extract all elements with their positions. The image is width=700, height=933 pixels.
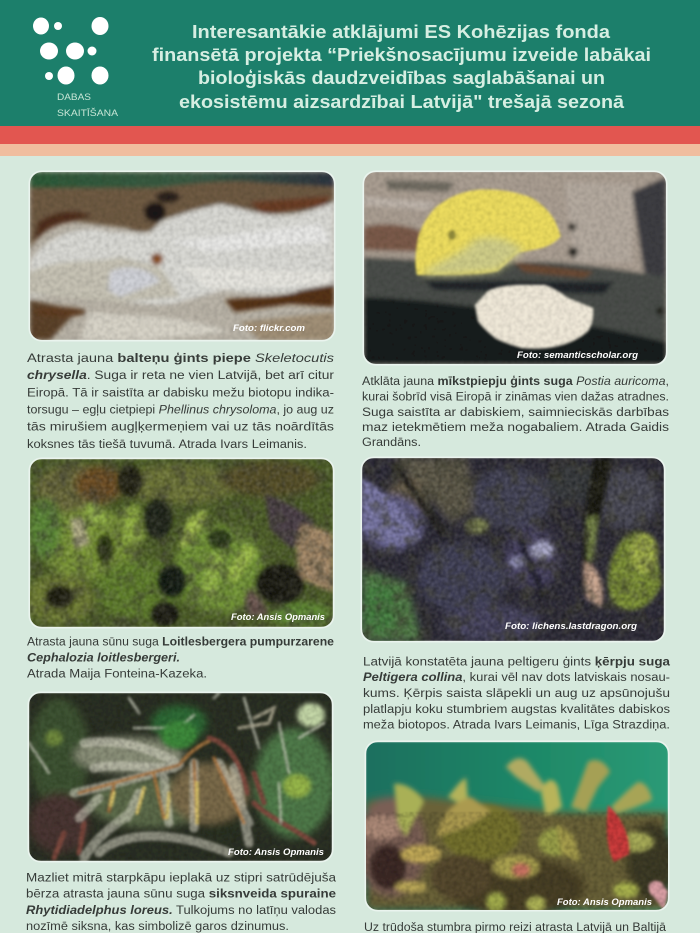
title: ekosistēmu aizsardzībai Latvijā" trešajā sezonā (179, 92, 625, 112)
text block: Cephalozia loitlesbergeri: Atrada Maija Fonteina-Kazeka. (27, 668, 207, 680)
photo: Rhytidiadelphus loreus moss (28, 692, 334, 862)
title (152, 22, 651, 112)
photo: yellow and white polypore on wood (362, 170, 668, 366)
text block: Rhytidiadelphus loreus: bērza atrasta jauna sūnu suga siksnveida spuraine (26, 888, 336, 900)
photo credit: Foto: semanticscholar.org (517, 350, 639, 360)
logo: Dabas skaitīšana: DABAS (57, 92, 91, 102)
text block: Skeletocutis chrysella: torsugu – egļu cietpiepi Phellinus chrysoloma , jo aug uz (27, 404, 334, 416)
text block: Postia auricoma: Atklāta jauna mīkstpiepju ģints suga Postia auricoma , (362, 375, 669, 388)
logo: Dabas skaitīšana (33, 17, 118, 118)
photo: moss shoots on green background (356, 740, 676, 917)
text block: Cephalozia loitlesbergeri (27, 636, 334, 680)
photo credit: Foto: Ansis Opmanis (557, 897, 652, 907)
photo: dark purple lichen on trunk (360, 456, 666, 642)
text block: Peltigera collina: Latvijā konstatēta jauna peltigeru ģints ķērpju suga (363, 656, 671, 668)
text block: Skeletocutis chrysella: chrysella . Suga ir reta ne vien Latvijā, bet arī citur (27, 370, 334, 382)
text block: Skeletocutis chrysella: Eiropā. Tā ir saistīta ar dabisku mežu biotopu indika- (27, 388, 334, 400)
title: finansētā projekta “Priekšnosacījumu izveide labākai (152, 45, 651, 65)
text block: Peltigera collina: meža biotopos. Atrada Ivars Leimanis, Līga Strazdiņa. (363, 720, 670, 732)
text block: Rhytidiadelphus loreus: Rhytidiadelphus loreus. Tulkojums no latīņu valodas (26, 905, 336, 917)
text block: Cephalozia loitlesbergeri: Atrasta jauna sūnu suga Loitlesbergera pumpurzarene (27, 636, 334, 648)
text block: Skeletocutis chrysella (27, 352, 334, 451)
text block: Skeletocutis chrysella: koksnes tās tiešā tuvumā. Atrada Ivars Leimanis. (27, 439, 307, 451)
text block: Peltigera collina: platlapju koku stumbriem augstas kvalitātes dabiskos (363, 704, 670, 716)
text block: Postia auricoma: kurai šobrīd visā Eiropā ir zināmas vien dažas atradnes. (362, 392, 669, 404)
text block: Rhytidiadelphus loreus: nozīmē siksna, kas simbolizē garos dzinumus. (26, 921, 289, 933)
photo: liverwort moss (25, 458, 334, 628)
header band (0, 0, 700, 156)
photo credit: Foto: flickr.com (233, 323, 305, 333)
text block: Postia auricoma (362, 375, 669, 449)
text block: Peltigera collina (363, 656, 671, 732)
photo: white crust fungus on bark (28, 170, 336, 342)
title: bioloģiskās daudzveidības saglabāšanai un (198, 68, 605, 88)
text block: Postia auricoma: maz ietekmētiem meža nogabaliem. Atrada Gaidis (362, 422, 669, 434)
text block: Postia auricoma: Suga saistīta ar dabiskiem, saimnieciskās darbības (362, 407, 669, 419)
text block: Rhytidiadelphus loreus (26, 872, 337, 933)
text block: Rhytidiadelphus loreus: Mazliet mitrā starpkāpu ieplakā uz stipri satrūdējuša (26, 872, 337, 884)
text block: Postia auricoma: Grandāns. (362, 437, 421, 449)
photo credit: Foto: lichens.lastdragon.org (505, 621, 638, 631)
photo credit: Foto: Ansis Opmanis (231, 612, 325, 622)
photo credit: Foto: Ansis Opmanis (228, 847, 324, 857)
text block: Cephalozia loitlesbergeri: Cephalozia loitlesbergeri. (27, 652, 180, 664)
text block: Skeletocutis chrysella: tās mirušiem augļķermeņiem vai uz tās noārdītās (27, 422, 334, 434)
text block: Peltigera collina: kums. Ķērpis saista slāpekli un aug uz apsūnojušu (363, 688, 670, 700)
text block: Peltigera collina: Peltigera collina , kurai vēl nav dots latviskais nosau- (363, 672, 670, 684)
logo: Dabas skaitīšana: SKAITĪŠANA (57, 108, 118, 118)
text block: Skeletocutis chrysella: Atrasta jauna balteņu ģints piepe Skeletocutis (27, 352, 334, 365)
title: Interesantākie atklājumi ES Kohēzijas fonda (192, 22, 611, 42)
